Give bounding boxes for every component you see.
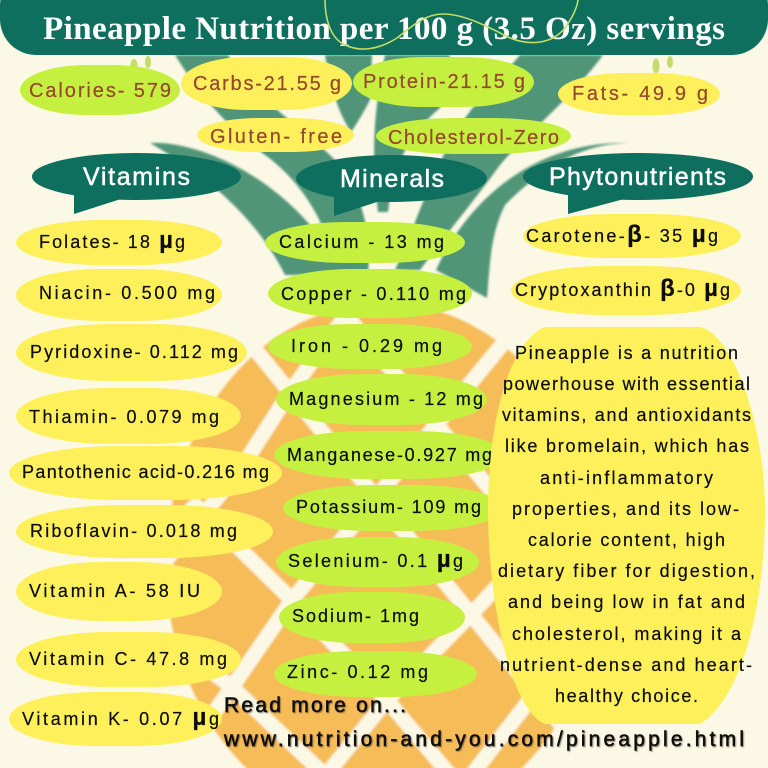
pill: vitamin C: Vitamin C- 47.8 mg — [29, 649, 227, 669]
panel: description: healthy choice. — [555, 686, 698, 706]
source link: Read more on... — [224, 694, 406, 717]
panel: description: nutrient-dense and heart- — [500, 655, 752, 675]
pill: cholesterol — [376, 118, 571, 154]
pill: pantothenic acid: Pantothenic acid-0.216 mg — [22, 462, 269, 482]
pill: calories — [20, 65, 180, 115]
pill: selenium — [276, 537, 479, 587]
heading: minerals: Minerals — [340, 165, 444, 193]
panel: description — [488, 327, 765, 724]
pill: vitamin A — [16, 562, 222, 621]
pill: iron: Iron - 0.29 mg — [291, 336, 442, 356]
pill: gluten — [197, 118, 354, 152]
pill: riboflavin: Riboflavin- 0.018 mg — [30, 521, 237, 541]
pill: magnesium — [276, 374, 487, 425]
pill: gluten: Gluten- free — [210, 126, 342, 148]
pineapple leaves — [150, 55, 630, 298]
header banner — [0, 0, 768, 55]
pill: carotene: Carotene-β- 35 µg — [526, 221, 718, 248]
pill: vitamin C — [16, 632, 241, 687]
pill: manganese — [274, 431, 504, 479]
panel: description: and being low in fat and — [508, 592, 745, 612]
pill: potassium: Potassium- 109 mg — [296, 497, 481, 517]
pill: riboflavin — [16, 505, 273, 558]
panel: description: anti-inflammatory — [540, 468, 713, 488]
pill: fats: Fats- 49.9 g — [572, 83, 708, 105]
vitamins list — [9, 220, 282, 746]
pill: cryptoxanthin: Cryptoxanthin β-0 µg — [515, 275, 730, 302]
pill: calcium: Calcium - 13 mg — [279, 232, 444, 252]
panel: description: Pineapple is a nutrition — [515, 343, 738, 363]
panel: description: cholesterol, making it a — [512, 624, 742, 644]
panel: description: vitamins, and antioxidants — [502, 405, 751, 425]
pill: sodium — [279, 592, 465, 643]
heading: phytonutrients — [523, 153, 753, 214]
pill: iron — [268, 324, 472, 369]
pill: niacin: Niacin- 0.500 mg — [39, 283, 215, 303]
pill: manganese: Manganese-0.927 mg — [287, 445, 492, 465]
source link: www.nutrition-and-you.com/pineapple.html — [223, 728, 744, 751]
pill: carotene — [523, 214, 741, 258]
panel: description: like bromelain, which has — [505, 436, 749, 456]
icon: green drops — [130, 56, 673, 74]
pill: thiamin — [16, 388, 241, 444]
panel: description: properties, and its low- — [512, 499, 739, 519]
pill: calcium — [265, 222, 465, 263]
pill: pantothenic acid — [9, 446, 282, 500]
section headings — [32, 153, 753, 216]
pill: folates: Folates- 18 µg — [39, 227, 185, 254]
pill: pyridoxine — [16, 324, 247, 381]
summary pills — [20, 57, 720, 154]
pill: carbs — [181, 57, 352, 110]
pill: zinc: Zinc- 0.12 mg — [287, 662, 428, 682]
pill: magnesium: Magnesium - 12 mg — [289, 389, 483, 409]
pill: niacin — [16, 269, 222, 321]
pill: vitamin K — [9, 692, 222, 746]
pill: pyridoxine: Pyridoxine- 0.112 mg — [30, 342, 238, 362]
panel: description: powerhouse with essential — [503, 374, 750, 394]
pill: sodium: Sodium- 1mg — [292, 606, 419, 626]
pill: copper — [268, 269, 472, 318]
pill: protein — [353, 57, 534, 107]
pill: cryptoxanthin — [511, 266, 741, 315]
heading: phytonutrients: Phytonutrients — [549, 163, 726, 191]
panel: description: dietary fiber for digestion, — [498, 561, 755, 581]
title: Pineapple Nutrition per 100 g (3.5 Oz) servings — [43, 11, 725, 47]
pill: potassium — [283, 485, 503, 531]
pill: copper: Copper - 0.110 mg — [281, 284, 466, 304]
decorative vine line — [325, 0, 578, 49]
pill: vitamin K: Vitamin K- 0.07 µg — [22, 704, 219, 731]
pill: vitamin A: Vitamin A- 58 IU — [29, 581, 200, 601]
pill: protein: Protein-21.15 g — [363, 71, 525, 93]
source link — [223, 694, 744, 751]
heading: vitamins — [32, 153, 241, 214]
pill: folates — [16, 220, 222, 265]
pineapple body — [169, 312, 556, 768]
pill: cholesterol: Cholesterol-Zero — [388, 127, 559, 149]
minerals list — [265, 222, 504, 697]
pill: fats — [558, 73, 720, 115]
heading: vitamins: Vitamins — [83, 163, 190, 191]
phytonutrients list — [511, 214, 741, 315]
pineapple illustration — [150, 55, 680, 768]
pill: selenium: Selenium- 0.1 µg — [288, 546, 463, 573]
heading: minerals — [296, 155, 487, 216]
pill: calories: Calories- 579 — [29, 80, 171, 102]
pill: thiamin: Thiamin- 0.079 mg — [29, 407, 219, 427]
panel: description: calorie content, high — [528, 530, 725, 550]
pill: carbs: Carbs-21.55 g — [193, 73, 341, 95]
pill: zinc — [274, 651, 477, 697]
